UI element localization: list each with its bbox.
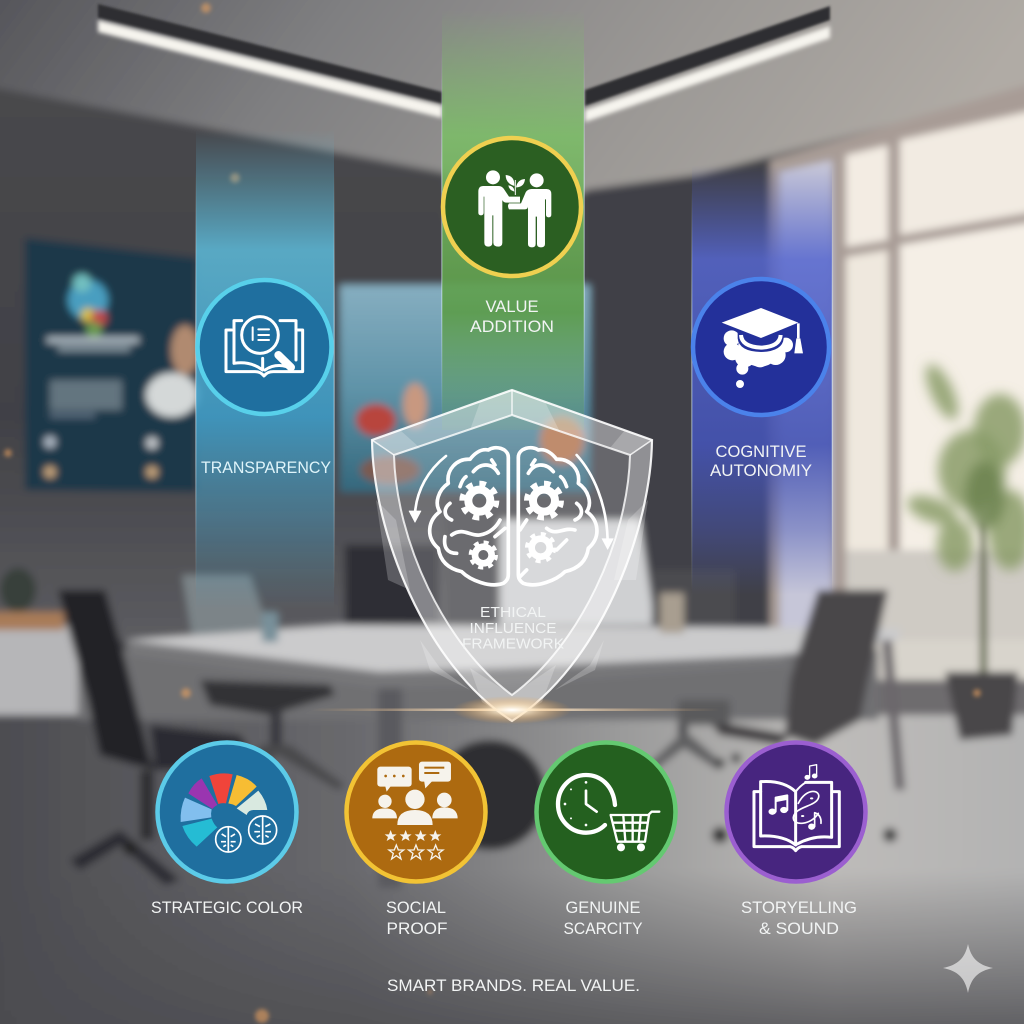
label: social proof: PROOF [386,920,448,938]
label: cognitive autonomy: COGNITIVE [716,443,806,461]
icon: transparency badge [198,280,332,414]
label: value addition: ADDITION [470,318,554,336]
ceiling lights [98,4,442,104]
icon: brain with gears [409,448,613,585]
right hemisphere [518,448,597,585]
label: genuine scarcity: SCARCITY [564,920,642,938]
central crystal shield [372,390,652,721]
pillar: value addition [441,10,585,430]
shield title: INFLUENCE [470,620,556,637]
label: storytelling and sound: & SOUND [759,920,839,938]
icon: social proof badge [346,742,486,882]
label: social proof: SOCIAL [386,899,446,917]
label: genuine scarcity: GENUINE [566,899,640,917]
icon: storytelling and sound badge [726,742,866,882]
label: storytelling and sound: STORYELLING [741,899,857,917]
label: value addition [470,298,554,336]
tagline: SMART BRANDS. REAL VALUE. [387,976,640,995]
label: cognitive autonomy: AUTONOMIY [710,462,812,480]
icon: cognitive autonomy badge [693,279,829,415]
shield title: FRAMEWORK [462,636,564,652]
icon: strategic color badge [158,742,296,882]
plant [903,360,1024,571]
glowing base line [310,696,720,724]
label: cognitive autonomy [710,443,812,480]
gears [468,490,490,512]
label: value addition: VALUE [486,298,538,316]
icon: sparkle watermark [943,944,993,993]
pillar: transparency [195,130,335,610]
shield title [462,604,564,652]
shield title: ETHICAL [480,604,546,621]
label: strategic color: STRATEGIC COLOR [151,899,303,917]
label: storytelling and sound [741,899,857,938]
pillar: cognitive autonomy [691,165,833,595]
icon: genuine scarcity badge [536,742,676,882]
label: transparency: TRANSPARENCY [201,459,331,477]
label: genuine scarcity [564,899,642,938]
cycle arrows [415,456,446,513]
label: social proof [386,899,448,938]
left hemisphere [430,448,508,585]
icon: value addition badge [443,138,581,276]
